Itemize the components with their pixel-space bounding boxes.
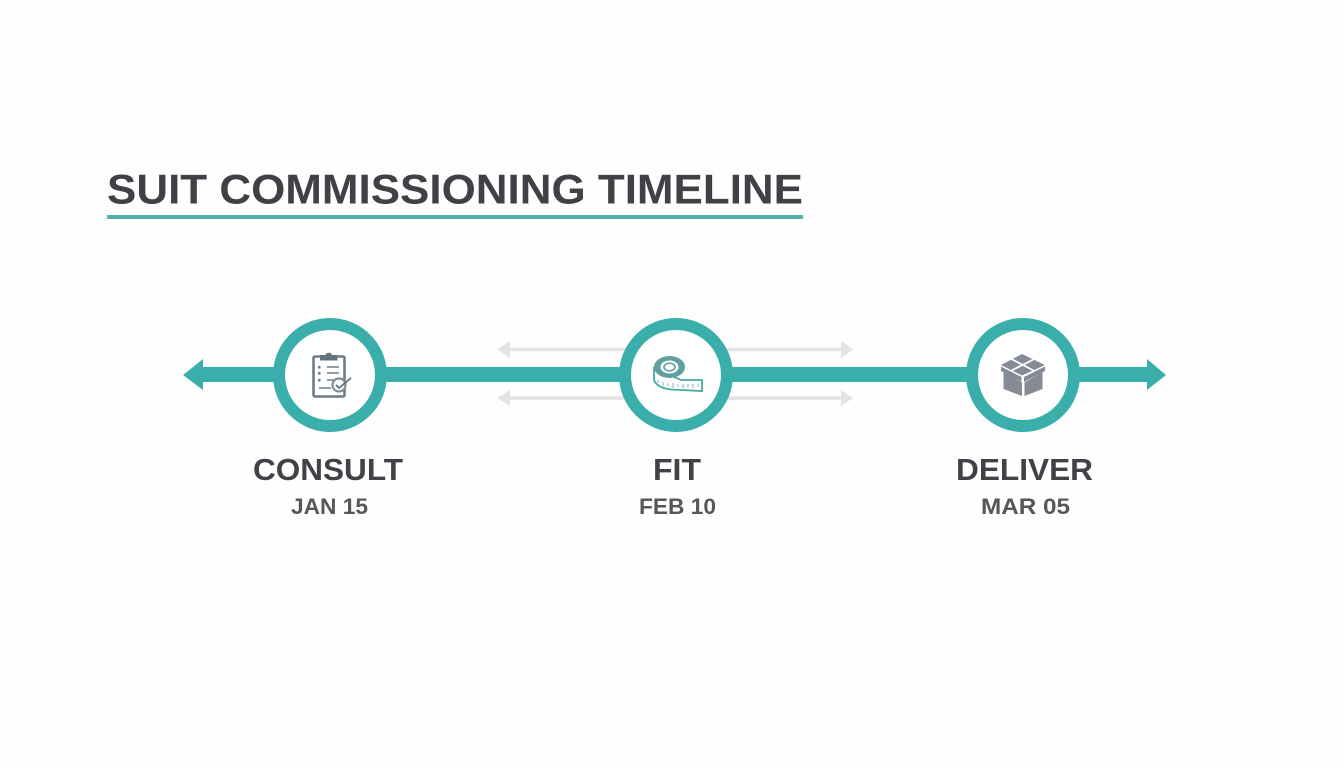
fit node ring <box>625 324 727 426</box>
consult label: CONSULT <box>253 453 403 487</box>
step: deliver <box>956 324 1093 519</box>
consult node ring <box>279 324 381 426</box>
step: fit <box>625 324 727 519</box>
title underline <box>107 215 803 219</box>
icon: clipboard with check <box>314 353 351 396</box>
consult date: JAN 15 <box>291 494 368 519</box>
title <box>107 166 803 219</box>
fit label: FIT <box>653 453 701 487</box>
deliver date: MAR 05 <box>981 494 1070 519</box>
fit date: FEB 10 <box>639 494 716 519</box>
grey arrow lower right <box>720 390 853 406</box>
main timeline axis with arrows <box>183 359 1166 390</box>
grey arrow lower left <box>497 390 630 406</box>
secondary grey arrows around fit step <box>497 341 853 406</box>
icon: measuring tape <box>654 356 702 391</box>
icon: package box <box>1001 354 1045 396</box>
grey arrow upper left <box>497 341 630 358</box>
deliver node ring <box>972 324 1074 426</box>
title text: SUIT COMMISSIONING TIMELINE <box>107 166 803 212</box>
step: consult <box>253 324 403 519</box>
deliver label: DELIVER <box>956 453 1093 487</box>
grey arrow upper right <box>720 341 853 358</box>
